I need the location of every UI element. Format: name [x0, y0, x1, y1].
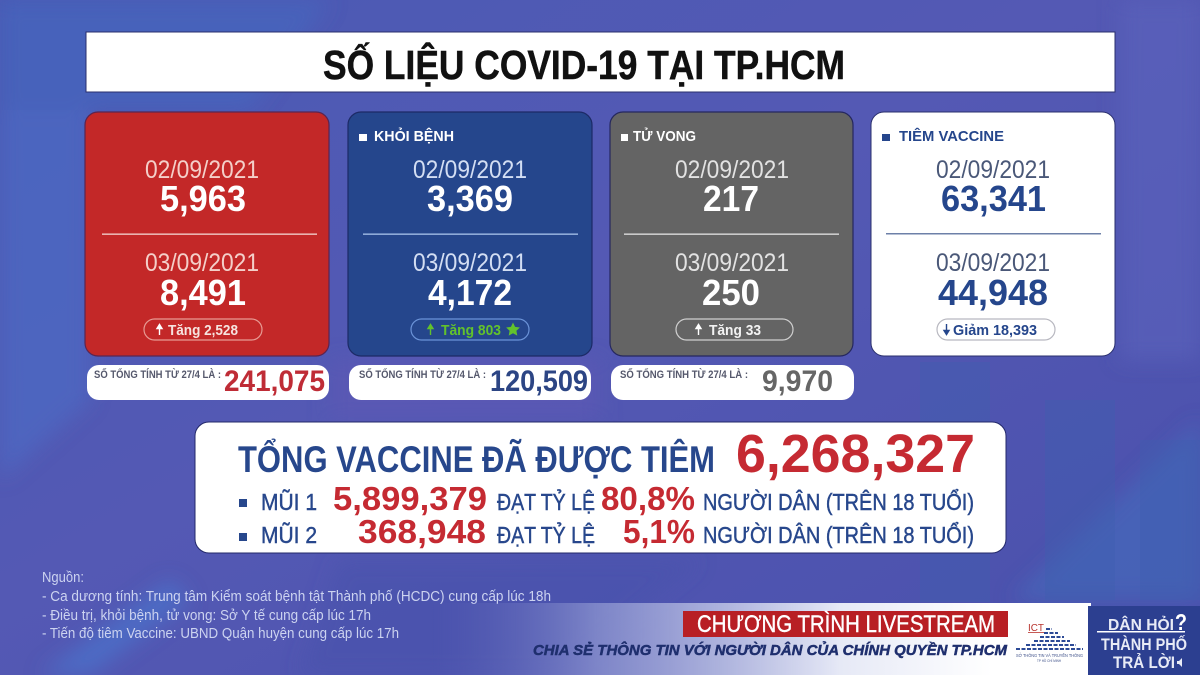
panel: deaths (grey): 250	[702, 272, 760, 313]
title text: SỐ LIỆU COVID-19 TẠI TP.HCM	[323, 42, 845, 88]
title banner	[86, 32, 1115, 92]
ICT logo: ICT	[1028, 622, 1045, 634]
panel: vaccination (white): 63,341	[941, 178, 1046, 219]
panel: total vaccine doses	[195, 422, 1006, 553]
program badge: THÀNH PHỐ	[1101, 634, 1187, 654]
source notes: - Ca dương tính: Trung tâm Kiểm soát bệnh tật Thành phố (HCDC) cung cấp lúc 18h	[42, 588, 551, 605]
row: dose 2: NGƯỜI DÂN (TRÊN 18 TUỔI)	[703, 521, 974, 548]
panel: deaths (grey): 03/09/2021	[675, 249, 789, 277]
source notes: - Tiến độ tiêm Vaccine: UBND Quận huyện cung cấp lúc 17h	[42, 625, 399, 642]
panel: new cases (red): 5,963	[160, 178, 246, 219]
change pill with star	[411, 319, 529, 340]
row: dose 1: NGƯỜI DÂN (TRÊN 18 TUỔI)	[703, 488, 974, 515]
row: dose 1: 5,899,379	[333, 480, 487, 517]
icon: speaker	[1177, 658, 1182, 667]
total: new cases	[87, 365, 329, 400]
ICT logo: SỞ THÔNG TIN VÀ TRUYỀN THÔNG	[1016, 652, 1083, 658]
program badge: DÂN HỎI	[1108, 615, 1174, 634]
change pill with star: Tăng 803	[441, 322, 501, 339]
panel: vaccination (white)	[871, 112, 1115, 356]
panel: recovered (blue)	[348, 112, 592, 356]
heading: TỔNG VACCINE ĐÃ ĐƯỢC TIÊM	[238, 437, 715, 480]
total: deaths: SỐ TỔNG TÍNH TỪ 27/4 LÀ :	[620, 367, 748, 381]
program badge: TRẢ LỜI	[1113, 653, 1175, 672]
panel: vaccination (white): 03/09/2021	[936, 249, 1050, 277]
change pill: Giảm 18,393	[953, 322, 1037, 339]
panel: recovered (blue): 4,172	[428, 272, 512, 313]
panel: new cases (red): 03/09/2021	[145, 249, 259, 277]
source notes: - Điều trị, khỏi bệnh, tử vong: Sở Y tế cung cấp lúc 17h	[42, 607, 371, 624]
bullet and heading: TIÊM VACCINE	[899, 127, 1004, 145]
source notes: Nguồn:	[42, 569, 84, 586]
panel: vaccination (white): 44,948	[938, 272, 1048, 313]
ICT logo	[1016, 622, 1083, 663]
total: recovered	[349, 365, 591, 400]
row: dose 2	[239, 513, 974, 550]
change pill	[144, 319, 262, 340]
total: recovered: 120,509	[490, 365, 588, 398]
panel: deaths (grey)	[610, 112, 853, 356]
program badge	[1088, 606, 1200, 675]
total: new cases: SỐ TỔNG TÍNH TỪ 27/4 LÀ :	[94, 367, 221, 381]
row: dose 1: 80,8%	[601, 480, 695, 517]
livestream label: CHƯƠNG TRÌNH LIVESTREAM	[697, 611, 995, 638]
footer banner	[430, 603, 1091, 675]
ICT logo: TP HỒ CHÍ MINH	[1037, 658, 1061, 663]
panel: new cases (red)	[85, 112, 329, 356]
subtitle: CHIA SẺ THÔNG TIN VỚI NGƯỜI DÂN CỦA CHÍNH QUYỀN TP.HCM	[533, 641, 1007, 659]
total number: 6,268,327	[736, 424, 975, 484]
row: dose 2: 5,1%	[623, 513, 695, 550]
change pill: Tăng 2,528	[168, 322, 238, 339]
change pill	[676, 319, 793, 340]
change pill	[937, 319, 1055, 340]
program badge: ?	[1175, 609, 1187, 635]
row: dose 1	[239, 480, 974, 517]
panel: new cases (red): 8,491	[160, 272, 246, 313]
row: dose 2: MŨI 2	[261, 521, 317, 548]
bullet and heading: KHỎI BỆNH	[374, 127, 454, 145]
source notes	[42, 569, 551, 642]
panel: deaths (grey): 02/09/2021	[675, 156, 789, 184]
row: dose 1: MŨI 1	[261, 488, 317, 515]
total: deaths	[611, 365, 854, 400]
total: recovered: SỐ TỔNG TÍNH TỪ 27/4 LÀ :	[359, 367, 486, 381]
bullet and heading: TỬ VONG	[633, 127, 696, 145]
row: dose 2: 368,948	[358, 513, 486, 550]
panel: recovered (blue): 3,369	[427, 178, 513, 219]
panel: deaths (grey): 217	[703, 178, 759, 219]
change pill: Tăng 33	[709, 322, 761, 339]
panel: new cases (red): 02/09/2021	[145, 156, 259, 184]
panel: recovered (blue): 02/09/2021	[413, 156, 527, 184]
row: dose 1: ĐẠT TỶ LỆ	[497, 487, 595, 515]
total: new cases: 241,075	[224, 365, 325, 398]
row: dose 2: ĐẠT TỶ LỆ	[497, 520, 595, 548]
panel: recovered (blue): 03/09/2021	[413, 249, 527, 277]
panel: vaccination (white): 02/09/2021	[936, 156, 1050, 184]
total: deaths: 9,970	[762, 365, 833, 398]
